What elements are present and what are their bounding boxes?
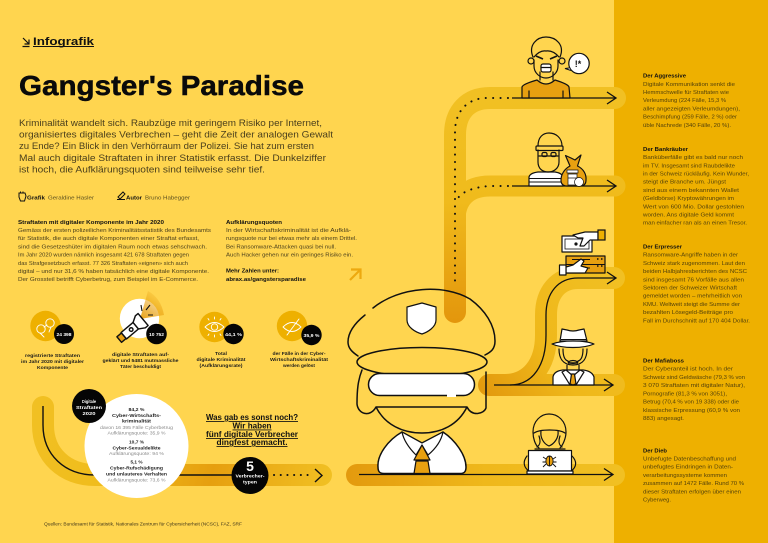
text block: Der Bankräuber: Banküberfälle gibt es bald nur noch bbox=[643, 155, 743, 161]
text block: Straftaten mit digitaler Komponente: das Strafgesetzbuch erfasst. 77 326 Straftaten «eignen» sich auch bbox=[18, 261, 188, 267]
character: bank robber bbox=[529, 133, 586, 186]
text block: Der Mafiaboss: 883) angesagt. bbox=[643, 416, 684, 422]
callout: Was gab es sonst noch?: dingfest gemacht. bbox=[216, 437, 288, 447]
text block: Der Erpresser: sind insgesamt 76 Vorfälle aus allen bbox=[643, 277, 744, 283]
stat: 24 398 registered offences: registrierte Straftaten bbox=[25, 353, 80, 358]
icon: graphic credit bbox=[19, 192, 26, 201]
stat: 44,1 % total clearance rate: digitale Kriminalität bbox=[196, 357, 246, 362]
tie bbox=[414, 445, 430, 474]
stat: 35,9 % cyber-economic crime solved: Wirtschaftskriminalität bbox=[270, 357, 328, 362]
circle: breakdown of digital offences: 10,7 % bbox=[129, 439, 145, 445]
stat: 44,1 % total clearance rate: 44,1 % bbox=[225, 332, 243, 338]
text block: Der Erpresser: Sektoren der Schweizer Wirtschaft bbox=[643, 286, 737, 292]
intro text: zu Ende? Ein Blick in den Verhörraum der Polizei. Sie hat zum ersten bbox=[19, 141, 314, 151]
text block: Der Erpresser: Ransomware-Angriffe haben in der bbox=[643, 253, 738, 259]
text block: Der Mafiaboss: Betrug (70,4 % von 19 338) oder die bbox=[643, 400, 739, 406]
lower hand bbox=[566, 259, 588, 273]
badge: Digitale Straftaten 2020: Straftaten bbox=[76, 405, 102, 411]
callout: Was gab es sonst noch?: fünf digitale Verbrecher bbox=[206, 429, 299, 439]
kicker: Infografik bbox=[22, 36, 95, 48]
arrows: route lines bbox=[359, 92, 616, 480]
text block: Der Dieb: zusammen auf 1472 Fälle. Rund 70 % bbox=[643, 481, 744, 487]
credits bbox=[19, 192, 190, 202]
stat: 10 752 solved offences: Täter beschuldigt bbox=[120, 364, 161, 369]
kicker: Infografik: Infografik bbox=[33, 36, 95, 48]
character: police officer bbox=[348, 289, 495, 474]
text block: Der Aggressive: Verleumdung (224 Fälle, 15,3 % bbox=[643, 98, 726, 104]
icon: handcuffs bbox=[37, 319, 54, 337]
intro text bbox=[19, 118, 333, 174]
callout: Was gab es sonst noch? bbox=[206, 412, 299, 447]
stat: 35,9 % cyber-economic crime solved: werden gelöst bbox=[282, 363, 315, 368]
text block: Der Dieb: unbefugtes Eindringen in Daten- bbox=[643, 465, 733, 471]
cap bbox=[373, 289, 495, 355]
text block: Der Bankräuber: Der Bankräuber bbox=[643, 147, 689, 153]
text block: Der Erpresser: beiden Halbjahresberichten des NCSC bbox=[643, 269, 747, 275]
text block: Straftaten mit digitaler Komponente: Gemäss der ersten polizeilichen Kriminalitätsstatistik des Bundesamts bbox=[18, 228, 211, 234]
text block: Der Mafiaboss bbox=[643, 358, 745, 422]
title: Gangster's Paradise bbox=[19, 70, 304, 101]
badge: Digitale Straftaten 2020 bbox=[72, 389, 106, 423]
text block: Der Erpresser: Fall im Durchschnitt auf 170 404 Dollar. bbox=[643, 318, 750, 324]
badge: 5 Verbrechertypen: Verbrecher- bbox=[236, 474, 265, 480]
credits: Autor bbox=[126, 196, 143, 202]
icon: crossed-out eye bbox=[283, 319, 301, 335]
visor bbox=[357, 348, 487, 376]
arrow: link up-right bbox=[350, 270, 360, 280]
stat: 24 398 registered offences: Komponente bbox=[37, 365, 68, 370]
money bag bbox=[561, 155, 586, 186]
text block: Der Bankräuber: steigt die Branche um. Jüngst bbox=[643, 180, 726, 186]
text block: Der Mafiaboss: Der Mafiaboss bbox=[643, 358, 684, 364]
text block: Der Erpresser: Der Erpresser bbox=[643, 244, 683, 250]
stat: 10 752 solved offences: digitale Straftaten auf- bbox=[112, 352, 170, 357]
text block: Aufklärungsquoten: rungsquote nur bei etwas mehr als einem Drittel. bbox=[226, 236, 357, 242]
icon: bug bbox=[542, 456, 556, 467]
stat: 10 752 solved offences: 10 752 bbox=[149, 332, 164, 338]
text block: Straftaten mit digitaler Komponente: Im Jahr 2020 wurden nämlich insgesamt 421 678 Straftaten gegen bbox=[18, 253, 189, 259]
badge: Digitale Straftaten 2020: Digitale bbox=[82, 399, 96, 405]
text block: Der Bankräuber: im TV. Insgesamt sind Raubdelikte bbox=[643, 163, 735, 169]
text block: Aufklärungsquoten: abrax.as/gangstersparadise bbox=[226, 277, 306, 283]
text block: Aufklärungsquoten: In der Wirtschaftskriminalität ist die Aufklä- bbox=[226, 228, 351, 234]
circle: breakdown of digital offences: 84,2 % bbox=[128, 407, 145, 413]
badge: Digitale Straftaten 2020: 2020 bbox=[82, 411, 96, 417]
credits: Grafik bbox=[27, 196, 46, 202]
circle: breakdown of digital offences: Cyber-Rufschädigung bbox=[110, 466, 163, 472]
circle: breakdown of digital offences bbox=[84, 394, 188, 498]
character: thief with laptop bbox=[524, 414, 576, 474]
circle: breakdown of digital offences: Cyber-Wirtschafts- bbox=[112, 413, 161, 419]
text block: Aufklärungsquoten: Auch Hacker gehen nur ein geringes Risiko ein. bbox=[226, 253, 353, 259]
text block: Der Erpresser: bezahlten Lösegeld-Beiträge pro bbox=[643, 310, 733, 316]
text block: Der Mafiaboss: Pornografie (81,3 % von 3051), bbox=[643, 391, 727, 397]
text block: Straftaten mit digitaler Komponente: Straftaten mit digitaler Komponente im Jahr 2020 bbox=[18, 220, 164, 226]
credits: Bruno Habegger bbox=[145, 196, 190, 202]
intro text: Mal auch digitale Straftaten in ihrer Statistik erfasst. Die Dunkelziffer bbox=[19, 153, 326, 163]
shirt bbox=[378, 432, 466, 474]
badge: 5 Verbrechertypen bbox=[232, 457, 268, 494]
stat: 35,9 % cyber-economic crime solved: der Fälle in der Cyber- bbox=[272, 351, 326, 356]
intro text: ist hoch, die Aufklärungsquoten sind teilweise sehr tief. bbox=[19, 164, 265, 174]
icon: flashlight bbox=[114, 314, 148, 346]
intro text: Kriminalität wandelt sich. Raubzüge mit geringem Risiko per Internet, bbox=[19, 118, 322, 128]
dotted arrow to offender types bbox=[274, 474, 310, 476]
circle: breakdown of digital offences: und unlauteres Verhalten bbox=[106, 472, 167, 478]
text block: Der Bankräuber: (Geldbörse) Kryptowährungen im bbox=[643, 196, 734, 202]
text block: Der Bankräuber: in der Schweiz rückläufig. Kein Wunder, bbox=[643, 172, 749, 178]
callout: Was gab es sonst noch?: Wir haben bbox=[232, 420, 272, 430]
text block: Straftaten mit digitaler Komponente: für Statistik, die auch digitale Komponenten einer Straftat erfasst, bbox=[18, 236, 199, 242]
text block: Der Mafiaboss: klassische Erpressung (60,9 % von bbox=[643, 408, 740, 414]
track: bottom-left route bbox=[43, 406, 322, 482]
text block: Der Erpresser: KMU. Weltweit steigt die Summe der bbox=[643, 302, 740, 308]
stat: 24 398 registered offences: im Jahr 2020 mit digitaler bbox=[21, 359, 84, 364]
badge: 5 Verbrechertypen: typen bbox=[243, 480, 257, 486]
badge: 5 Verbrechertypen: 5 bbox=[246, 458, 254, 474]
text block: Der Erpresser: Schweiz stark zugenommen. Laut den bbox=[643, 261, 745, 267]
text block: Straftaten mit digitaler Komponente: digital – und nur 31,6 % haben tatsächlich eine digitale Komponente. bbox=[18, 269, 209, 275]
credits: Geraldine Hasler bbox=[48, 196, 94, 202]
text block: Straftaten mit digitaler Komponente bbox=[18, 220, 211, 283]
circle: breakdown of digital offences: Aufklärungsquote: 94 % bbox=[109, 451, 165, 457]
intro text: organisiertes digitales Verbrechen – geht die Zeit der analogen Gewalt bbox=[19, 130, 333, 140]
text block: Aufklärungsquoten bbox=[226, 220, 357, 283]
stat: 10 752 solved offences: geklärt und 5481 mutmassliche bbox=[102, 358, 179, 363]
server bbox=[566, 256, 605, 273]
text block: Der Aggressive: Digitale Kommunikation senkt die bbox=[643, 82, 735, 88]
text block: Der Dieb: verarbeitungssysteme kommen bbox=[643, 473, 727, 479]
circle: breakdown of digital offences: 5,1 % bbox=[130, 460, 143, 466]
icon: author pen bbox=[117, 192, 125, 200]
text block: Straftaten mit digitaler Komponente: Der Grossteil betrifft Cyberbetrug, zum Beispiel im E-Commerce. bbox=[18, 277, 198, 283]
circle: breakdown of digital offences: Cyber-Sexualdelikte bbox=[112, 445, 161, 451]
text block: Der Erpresser bbox=[643, 244, 750, 324]
text block: Aufklärungsquoten: Bei Ransomware-Attacken quasi bei null. bbox=[226, 244, 336, 250]
text block: Der Mafiaboss: Schweiz sind Geldwäsche (79,3 % von bbox=[643, 375, 745, 381]
text block: Der Bankräuber: sind aus einem bekannten Wallet bbox=[643, 188, 739, 194]
text block: Der Mafiaboss: 3 070 Straftaten mit digitaler Natur), bbox=[643, 383, 745, 389]
circle: breakdown of digital offences: davon 16 395 Fälle Cyberbetrug bbox=[100, 425, 173, 431]
text block: Der Aggressive: Der Aggressive bbox=[643, 74, 686, 80]
stat: 44,1 % total clearance rate: (Aufklärungsrate) bbox=[200, 363, 243, 368]
text block: Der Aggressive: üble Nachrede (340 Fälle, 20 %). bbox=[643, 123, 731, 129]
text block: Der Dieb: Unbefugte Datenbeschaffung und bbox=[643, 456, 736, 462]
text block: Aufklärungsquoten: Mehr Zahlen unter: bbox=[226, 268, 279, 274]
text block: Straftaten mit digitaler Komponente: sind die Gesetzeshüter im digitalen Raum noch etwas sehschwach. bbox=[18, 244, 207, 250]
text block: Der Bankräuber bbox=[642, 147, 749, 227]
text block: Der Dieb bbox=[643, 448, 744, 504]
dotted routes bbox=[455, 98, 508, 287]
text block: Der Aggressive: Hemmschwelle für Straftaten wie bbox=[643, 90, 729, 96]
sunglasses bbox=[368, 374, 474, 396]
tracks: right routes bbox=[357, 98, 615, 475]
text block: Der Mafiaboss: Der Cyberanteil ist hoch. In der bbox=[643, 367, 733, 373]
icon: eye bbox=[205, 317, 224, 337]
circle: breakdown of digital offences: kriminalität bbox=[122, 418, 151, 424]
text block: Der Bankräuber: man einfacher ran als an einen Tresor. bbox=[643, 221, 747, 227]
character: mafia boss bbox=[552, 329, 594, 385]
sources: Quellen: Bundesamt für Statistik, Nationales Zentrum für Cybersicherheit (NCSC), FAZ, SRF bbox=[44, 522, 242, 528]
text block: Der Aggressive: aller angezeigten Verleumdungen), bbox=[643, 106, 740, 112]
stat: 24 398 registered offences bbox=[21, 311, 84, 370]
text block: Der Aggressive bbox=[643, 74, 740, 129]
stat: 44,1 % total clearance rate: Total bbox=[215, 351, 227, 356]
text block: Der Bankräuber: Wert von 600 Mio. Dollar gestohlen bbox=[643, 204, 744, 210]
right sidebar panel bbox=[614, 0, 768, 543]
circle: breakdown of digital offences: Aufklärungsquote: 35,9 % bbox=[108, 430, 166, 436]
text block: Der Dieb: Der Dieb bbox=[643, 448, 668, 454]
head bbox=[357, 370, 486, 433]
circle: breakdown of digital offences: Aufklärungsquote: 73,6 % bbox=[108, 478, 166, 484]
banknote bbox=[562, 236, 592, 252]
stat: 10 752 solved offences bbox=[102, 291, 179, 369]
text block: Der Aggressive: Beschimpfung (259 Fälle, 2 %) oder bbox=[643, 115, 737, 121]
stat: 24 398 registered offences: 24 398 bbox=[56, 332, 72, 338]
stat: 44,1 % total clearance rate bbox=[196, 312, 246, 368]
text block: Aufklärungsquoten: Aufklärungsquoten bbox=[226, 220, 283, 226]
text block: Der Dieb: dieser Straftaten erfolgen über einen bbox=[643, 489, 741, 495]
text block: Der Bankräuber: worden. Ans digitale Geld kommt bbox=[642, 212, 734, 218]
callout: Was gab es sonst noch?: Was gab es sonst noch? bbox=[206, 412, 298, 422]
character: extortionist icons bbox=[560, 230, 605, 275]
speech bubble: !* bbox=[575, 59, 582, 69]
stat: 35,9 % cyber-economic crime solved: 35,9 % bbox=[304, 333, 320, 339]
collar bbox=[402, 432, 443, 455]
character: aggressive man bbox=[522, 37, 589, 98]
upper hand bbox=[573, 232, 598, 246]
text block: Der Erpresser: gemeldet worden – mehrheitlich von bbox=[643, 294, 742, 300]
cap badge bbox=[407, 303, 436, 334]
text block: Der Dieb: Cyberweg. bbox=[643, 498, 671, 504]
stat: 35,9 % cyber-economic crime solved bbox=[270, 311, 328, 368]
